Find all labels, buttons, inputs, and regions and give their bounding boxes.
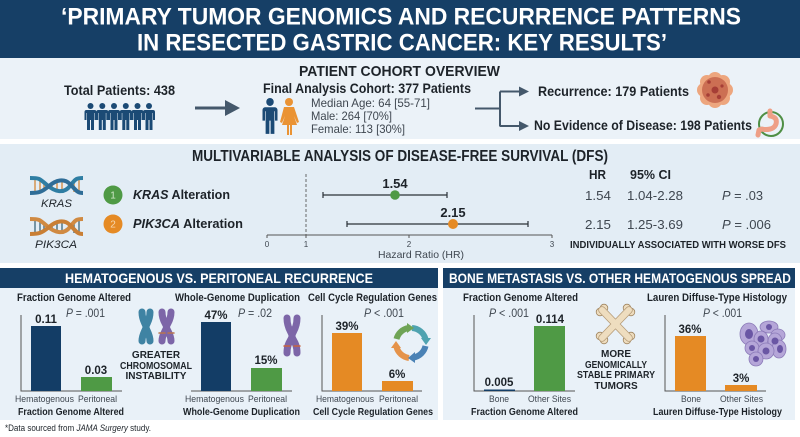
results table: P = .006: [722, 218, 771, 232]
chart: cell cycle regulation genes: Peritoneal: [379, 394, 418, 405]
footnote: *Data sourced from JAMA Surgery study.: [5, 423, 151, 433]
chart: fraction genome altered: Fraction Genome Altered: [17, 292, 131, 304]
icon: KRAS DNA: [30, 178, 83, 193]
chart: cell cycle regulation genes: Cell Cycle Regulation Genes: [308, 292, 437, 304]
chart: fraction genome altered: P = .001: [66, 308, 105, 320]
point: PIK3CA HR: [440, 205, 466, 229]
results table: 1.54: [585, 189, 611, 203]
callout: more genomically stable primary tumors: MORE: [601, 349, 631, 360]
KRAS icon label: KRAS: [41, 198, 73, 210]
title banner: [0, 0, 800, 58]
icon: chromosome pair: [142, 312, 174, 341]
chart: cell cycle regulation genes: 6%: [389, 369, 405, 381]
cohort demographics: Female: 113 [30%]: [311, 122, 405, 136]
chart: Lauren diffuse-type histology: Other Sites: [720, 394, 763, 405]
chart: whole-genome duplication: P = .02: [238, 308, 272, 320]
forest plot: 2: [407, 240, 412, 249]
point: PIK3CA HR: 2.15: [440, 205, 466, 220]
final analysis cohort label: Final Analysis Cohort: 377 Patients: [263, 80, 471, 96]
results table: P = .03: [722, 189, 763, 203]
cohort demographics: Male: 264 [70%]: [311, 109, 392, 123]
icon: tumor: [697, 72, 733, 108]
forest plot: 1: [304, 240, 309, 249]
chart: cell cycle regulation genes: [308, 292, 437, 418]
panel: patient cohort overview: [0, 58, 800, 139]
icon: group of patients: [84, 103, 155, 130]
title banner: IN RESECTED GASTRIC CANCER: KEY RESULTS’: [137, 30, 667, 56]
chart: Lauren diffuse-type histology: [647, 292, 788, 418]
callout: greater chromosomal instability: [120, 350, 192, 382]
results table: 1.25-3.69: [627, 218, 683, 232]
callout: more genomically stable primary tumors: [577, 349, 655, 392]
chart: cell cycle regulation genes: Hematogenous: [316, 394, 374, 405]
heading: multivariable analysis: MULTIVARIABLE ANALYSIS OF DISEASE-FREE SURVIVAL (DFS): [192, 148, 608, 165]
chart: cell cycle regulation genes: Cell Cycle Regulation Genes: [313, 406, 433, 418]
arrow: total to final cohort: [195, 100, 240, 116]
results table: HR: [589, 168, 606, 182]
forest plot: 0: [265, 240, 270, 249]
panel: bone metastasis vs other hematogenous spread: [443, 268, 795, 420]
results table: 2.15: [585, 218, 611, 232]
marker 2: [104, 214, 122, 234]
chart: cell cycle regulation genes: P < .001: [364, 308, 404, 320]
recurrence label: Recurrence: 179 Patients: [538, 83, 689, 99]
point: KRAS HR: 1.54: [382, 176, 408, 191]
chart: whole-genome duplication: Hematogenous: [185, 394, 244, 405]
callout: greater chromosomal instability: GREATER: [132, 350, 181, 361]
callout: greater chromosomal instability: INSTABILITY: [126, 371, 187, 382]
chart: whole-genome duplication: Whole-Genome Duplication: [183, 406, 300, 418]
chart: Lauren diffuse-type histology: Lauren Diffuse-Type Histology: [653, 406, 782, 418]
cohort demographics: [311, 96, 430, 136]
results table: 95% CI: [630, 168, 671, 182]
marker 1: [104, 186, 122, 204]
icon: healthy stomach: [758, 111, 783, 136]
heading: patient cohort overview: PATIENT COHORT OVERVIEW: [299, 63, 501, 80]
icon: diffuse-type cells: [740, 321, 786, 366]
chart: fraction genome altered: 0.11: [35, 314, 57, 326]
chart: bone fraction genome altered: Fraction Genome Altered: [471, 406, 578, 418]
chart: whole-genome duplication: 15%: [254, 355, 278, 367]
results table: [585, 168, 771, 232]
icon: man and woman: [262, 98, 299, 135]
chart: whole-genome duplication: [175, 292, 300, 418]
title banner: ‘PRIMARY TUMOR GENOMICS AND RECURRENCE PATTERNS: [61, 4, 741, 30]
chart: bone fraction genome altered: P < .001: [489, 308, 529, 320]
KRAS alteration label: KRAS Alteration: [133, 187, 230, 202]
point: KRAS HR: [382, 176, 408, 200]
results table: 1.04-2.28: [627, 189, 683, 203]
chart: bone fraction genome altered: Other Sites: [528, 394, 571, 405]
chart: fraction genome altered: Fraction Genome Altered: [18, 406, 124, 418]
panel: hematogenous vs peritoneal recurrence: [0, 268, 438, 420]
chart: cell cycle regulation genes: 39%: [335, 321, 359, 333]
callout: more genomically stable primary tumors: TUMORS: [594, 381, 638, 392]
forest plot: Hazard Ratio (HR): [378, 249, 464, 261]
chart: fraction genome altered: Hematogenous: [15, 394, 74, 405]
chart: bone fraction genome altered: 0.114: [536, 314, 565, 326]
arrow: fork to outcomes: [475, 86, 529, 131]
chart: Lauren diffuse-type histology: Bone: [681, 394, 701, 405]
callout: more genomically stable primary tumors: GENOMICALLY: [585, 360, 647, 371]
chart: fraction genome altered: [15, 292, 131, 418]
chart: fraction genome altered: 0.03: [85, 365, 107, 377]
chart: bone fraction genome altered: 0.005: [485, 377, 514, 389]
marker 2: 2: [110, 220, 116, 230]
no evidence of disease label: No Evidence of Disease: 198 Patients: [534, 117, 752, 133]
forest plot: [265, 174, 555, 261]
icon: PIK3CA DNA: [30, 219, 83, 234]
chart: whole-genome duplication: Peritoneal: [248, 394, 287, 405]
forest plot: 3: [550, 240, 555, 249]
callout: greater chromosomal instability: CHROMOSOMAL: [120, 361, 192, 372]
marker 1: 1: [110, 190, 116, 202]
chart: whole-genome duplication: Whole-Genome Duplication: [175, 292, 300, 304]
cohort demographics: Median Age: 64 [55-71]: [311, 96, 430, 110]
total patients label: Total Patients: 438: [64, 82, 175, 98]
icon: chromosome: [284, 318, 300, 353]
icon: crossed bones: [596, 304, 635, 344]
PIK3CA alteration label: PIK3CA Alteration: [133, 216, 243, 231]
heading bar: hematogenous vs peritoneal: [0, 268, 438, 288]
chart: bone fraction genome altered: [463, 292, 578, 418]
chart: fraction genome altered: Peritoneal: [78, 394, 117, 405]
chart: whole-genome duplication: 47%: [204, 310, 228, 322]
callout: more genomically stable primary tumors: STABLE PRIMARY: [577, 370, 655, 381]
chart: Lauren diffuse-type histology: 36%: [678, 324, 702, 336]
PIK3CA icon label: PIK3CA: [35, 239, 77, 251]
chart: Lauren diffuse-type histology: P < .001: [703, 308, 742, 320]
chart: bone fraction genome altered: Bone: [489, 394, 509, 405]
panel: multivariable analysis: [0, 144, 800, 263]
heading bar: hematogenous vs peritoneal: HEMATOGENOUS VS. PERITONEAL RECURRENCE: [65, 270, 373, 286]
icon: cell cycle ring: [391, 323, 431, 363]
chart: Lauren diffuse-type histology: 3%: [733, 373, 749, 385]
chart: bone fraction genome altered: Fraction Genome Altered: [463, 292, 578, 304]
